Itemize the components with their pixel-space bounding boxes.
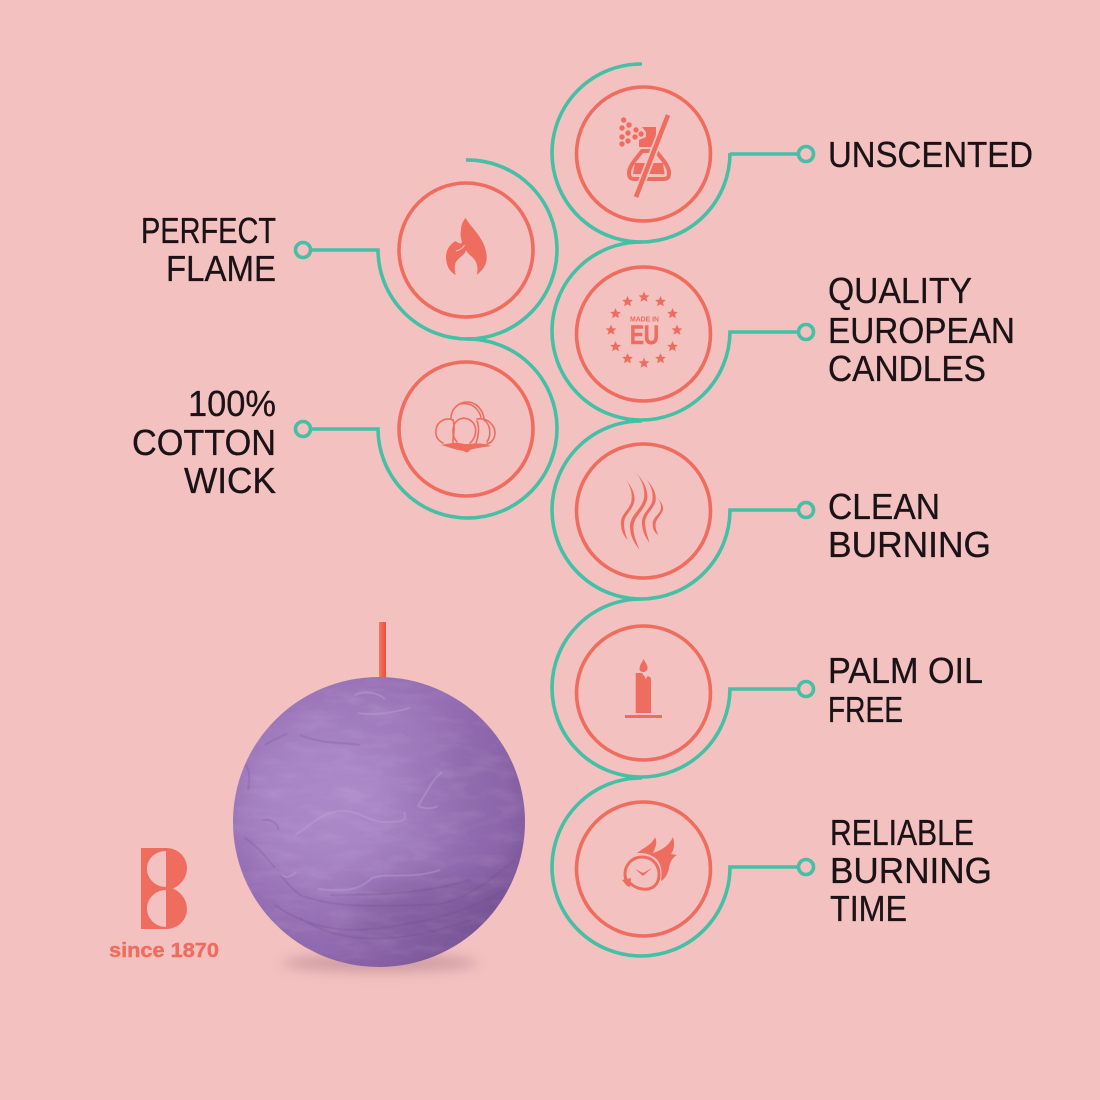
cotton dot [296,422,310,436]
label: reliable burning time [830,812,992,929]
icon: burning clock [622,837,677,889]
connector arcs [310,64,800,956]
label: quality european candles: CANDLES [828,348,986,389]
candle product [233,622,550,972]
flame dot [296,242,310,258]
reliable dot [798,860,814,874]
logo tagline: since 1870 [109,940,219,962]
icon: made in EU stars: EU [630,320,659,350]
cotton ring [399,362,533,496]
icon: candle [625,659,662,718]
label: reliable burning time: BURNING [830,850,992,891]
feature: unscented [576,87,1033,221]
unscented dot [798,146,814,162]
label: cotton wick: COTTON [132,422,276,463]
label: reliable burning time: RELIABLE [830,812,974,853]
icon: made in EU stars [606,292,682,368]
clean dot [798,502,814,518]
flame ring [399,183,533,317]
label: cotton wick: 100% [188,383,276,424]
label: cotton wick: WICK [184,460,276,501]
label: unscented: UNSCENTED [828,134,1033,175]
label: reliable burning time: TIME [830,888,907,929]
logo [109,848,219,962]
label: quality european candles: EUROPEAN [828,310,1015,351]
label: palm oil free: FREE [828,689,903,730]
feature: clean burning [576,444,991,578]
logo mark [141,848,187,929]
europe dot [798,324,814,340]
clean ring [576,444,710,578]
feature: quality european candles [576,267,1015,401]
feature: perfect flame [141,183,533,317]
label: clean burning [828,486,991,565]
label: palm oil free: PALM OIL [828,650,983,691]
reliable ring [576,802,710,936]
icon: smoke waves [621,473,663,550]
europe ring [576,267,710,401]
feature: cotton wick [132,362,533,501]
icon: crossed out perfume spray [619,115,669,197]
label: clean burning: CLEAN [828,486,940,527]
label: perfect flame: PERFECT [141,210,276,251]
label: perfect flame: FLAME [166,248,276,289]
label: palm oil free [828,650,983,730]
label: perfect flame [141,210,276,289]
label: quality european candles [828,270,1015,389]
label: cotton wick [132,383,276,501]
unscented ring [576,87,710,221]
palm ring [576,626,710,760]
palm dot [798,682,814,696]
icon: made in EU stars: MADE IN [630,314,659,324]
icon: cotton boll [436,402,495,452]
icon: flame [446,218,487,275]
feature: palm oil free [576,626,983,760]
label: quality european candles: QUALITY [828,270,972,311]
feature: reliable burning time [576,802,992,936]
label: clean burning: BURNING [828,524,991,565]
